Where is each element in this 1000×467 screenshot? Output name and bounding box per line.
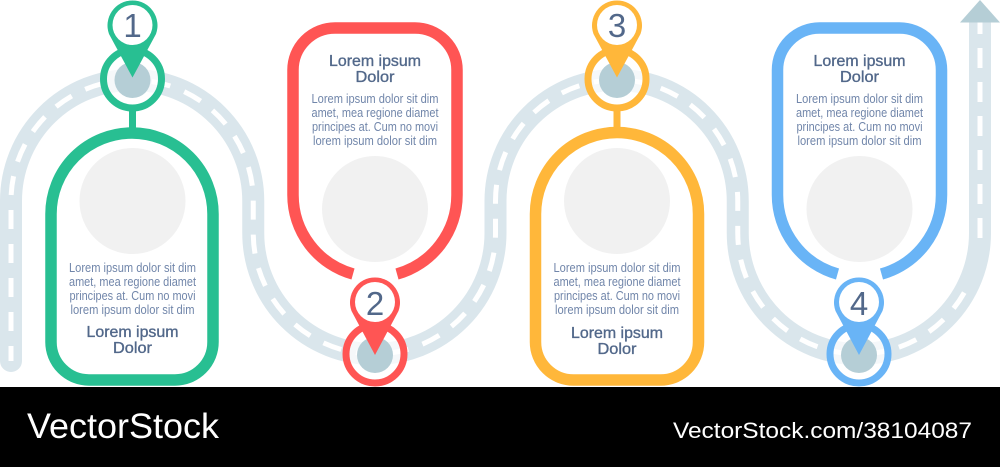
- footer band: [0, 387, 1000, 467]
- body text 2: lorem ipsum dolor sit dim: [313, 134, 437, 148]
- body text 4: lorem ipsum dolor sit dim: [798, 134, 922, 148]
- image placeholder 2: [322, 156, 428, 262]
- body text 1: amet, mea regione diamet: [69, 275, 196, 289]
- body text 1: Lorem ipsum dolor sit dim: [69, 261, 196, 275]
- image placeholder 4: [806, 156, 912, 262]
- footer logo: VectorStock: [27, 407, 220, 446]
- image placeholder 3: [564, 148, 670, 254]
- heading 3: Dolor: [598, 341, 636, 358]
- step 3 marker: [588, 0, 646, 131]
- body text 3: lorem ipsum dolor sit dim: [555, 303, 679, 317]
- body text 2: Lorem ipsum dolor sit dim: [312, 92, 438, 106]
- step 4 marker: [830, 277, 888, 383]
- body text 1: lorem ipsum dolor sit dim: [70, 303, 194, 317]
- step 3 panel: [536, 133, 698, 380]
- step 2 panel: [293, 28, 457, 274]
- panel outline 3: [536, 133, 698, 380]
- step 1 panel: [51, 133, 213, 380]
- body text 4: principes at. Cum no movi: [796, 120, 922, 134]
- heading 2: Lorem ipsum: [329, 53, 421, 70]
- body text 2: amet, mea regione diamet: [312, 106, 439, 120]
- step 1 marker: [104, 0, 162, 131]
- body text 3: Lorem ipsum dolor sit dim: [554, 261, 680, 275]
- panel outline 4: [778, 28, 942, 274]
- arrow head: [960, 0, 1000, 22]
- body text 2: principes at. Cum no movi: [312, 120, 438, 134]
- step 2 marker: [346, 277, 404, 383]
- step 1 marker: 1: [123, 7, 142, 44]
- heading 4: Dolor: [840, 69, 879, 86]
- image placeholder 1: [80, 148, 186, 254]
- heading 3: Lorem ipsum: [571, 325, 663, 342]
- body text 4: Lorem ipsum dolor sit dim: [796, 92, 923, 106]
- heading 4: Lorem ipsum: [814, 53, 906, 70]
- step 3 marker: 3: [608, 7, 626, 44]
- body text 3: amet, mea regione diamet: [554, 275, 681, 289]
- heading 1: Lorem ipsum: [86, 324, 178, 341]
- heading 1: Dolor: [113, 340, 152, 357]
- step 4 marker: 4: [850, 285, 868, 322]
- winding road: [11, 20, 980, 361]
- step 2 marker: 2: [366, 285, 384, 322]
- footer image id: VectorStock.com/38104087: [673, 418, 972, 443]
- heading 2: Dolor: [356, 69, 394, 86]
- body text 3: principes at. Cum no movi: [554, 289, 680, 303]
- panel outline 2: [293, 28, 457, 274]
- step 4 panel: [778, 28, 942, 274]
- body text 4: amet, mea regione diamet: [796, 106, 923, 120]
- body text 1: principes at. Cum no movi: [70, 289, 196, 303]
- panel outline 1: [51, 133, 213, 380]
